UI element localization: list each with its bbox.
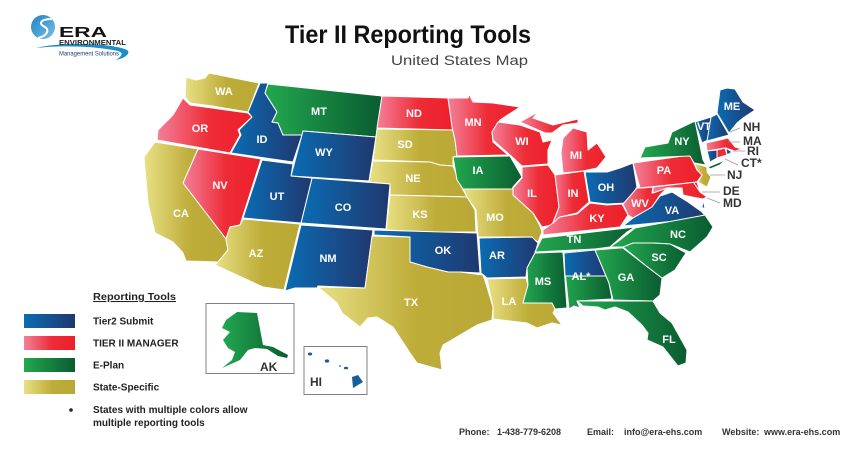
state: Kansas: KS [412,209,428,221]
callout labels: northeast states: MD [723,196,742,210]
state: South Dakota: SD [397,139,413,151]
state: Tennessee [535,227,635,252]
state: Louisiana: LA [502,296,516,308]
inset: Alaska: AK [260,360,278,374]
state: West Virginia: WV [631,198,650,210]
state: Wyoming [291,131,376,181]
logo: ERA Environmental Management Solutions [31,15,128,60]
state: North Dakota [377,96,453,130]
state: California [144,142,228,262]
footer contact details: Website: [722,427,759,437]
footer contact details: Phone: [459,427,490,437]
legend note: multiple reporting tools [93,418,205,429]
logo: ERA Environmental Management Solutions: ERA [59,24,107,41]
callout labels: northeast states: MA [743,134,762,148]
title: Tier II Reporting Tools [285,21,531,49]
legend item: State-Specific [24,380,160,394]
legend item: TIER II MANAGER [24,336,179,350]
callout labels: northeast states: CT* [741,156,762,170]
state: Massachusetts [706,138,742,151]
state: Virginia [623,192,707,226]
state: Louisiana [487,278,562,328]
state: Alabama (two tools): AL* [572,271,591,283]
legend item: Tier2 Submit [24,314,154,328]
logo: ERA Environmental Management Solutions: Management Solutions [59,50,120,58]
state: Missouri [463,189,542,242]
state: Oklahoma [374,230,480,273]
state: Florida: FL [662,334,676,346]
legend item: TIER II MANAGER: TIER II MANAGER [93,338,179,350]
subtitle: United States Map [391,53,528,68]
state: Florida [577,301,687,366]
state: Wisconsin: WI [515,136,529,148]
state: Vermont: VT [697,121,711,133]
state: Virginia: VA [665,205,679,217]
state: North Carolina [610,215,713,252]
state: Arkansas: AR [489,250,505,262]
state: Michigan [520,112,606,173]
state: Utah [243,160,312,223]
state: New Mexico: NM [319,253,337,265]
state: Ohio [585,163,637,204]
state: Kansas [386,195,476,232]
callout labels: northeast states: NJ [727,168,742,182]
state: Michigan: MI [570,150,582,162]
state: Idaho: ID [256,134,268,146]
state: Maine: ME [724,101,740,113]
state: Nevada: NV [212,180,228,192]
state: Georgia: GA [618,272,634,284]
footer contact details [459,427,840,437]
state: Indiana: IN [568,188,579,200]
state: Connecticut [707,148,727,162]
logo: ERA Environmental Management Solutions: ENVIRONMENTAL [59,38,126,47]
state: Iowa: IA [472,165,484,177]
state: South Carolina [623,243,686,278]
map: contiguous United States [144,73,755,370]
state: Arizona [215,219,300,290]
footer contact details: Email: [587,427,614,437]
state: Missouri: MO [486,212,504,224]
state: Maine [717,88,755,133]
state: Texas [318,236,493,370]
state: New Jersey [694,163,711,187]
state: West Virginia [623,187,667,218]
inset: Hawaii: HI [310,375,322,389]
state: Colorado: CO [335,202,352,214]
inset: Alaska [206,304,294,374]
state: Kentucky [543,203,628,235]
state: New York [640,121,725,169]
state: Illinois: IL [527,188,537,200]
legend [24,291,248,429]
state: Arizona: AZ [249,248,264,260]
state: New Mexico [285,225,373,291]
state: Oregon [157,98,252,153]
state: South Dakota [373,129,457,166]
state: Georgia [595,248,662,301]
state: Montana: MT [311,106,327,118]
state: North Dakota: ND [406,108,422,120]
legend item: E-Plan: E-Plan [93,360,124,372]
state: Utah: UT [270,191,285,203]
state: Montana [265,84,382,137]
legend item: Tier2 Submit: Tier2 Submit [93,316,154,328]
legend note [69,405,248,429]
state: Pennsylvania: PA [657,165,671,177]
state: South Carolina: SC [651,252,667,264]
state: Nebraska [369,161,467,197]
state: Nebraska: NE [405,173,421,185]
footer contact details: www.era-ehs.com [763,427,840,437]
state: Texas: TX [404,297,419,309]
inset: Hawaii [304,346,367,394]
state: Idaho [231,83,302,162]
callout labels: northeast states [702,120,762,210]
state: New Hampshire [707,114,729,141]
footer contact details: info@era-ehs.com [624,427,702,437]
state: Minnesota [448,94,520,156]
state: Indiana [553,171,589,223]
state: Iowa [453,156,522,190]
state: Illinois [513,165,559,227]
state: Ohio: OH [598,182,614,194]
legend heading: Reporting Tools [93,291,176,303]
state: Nevada [183,149,261,239]
state: Maryland and Delaware [653,182,707,199]
state: Oklahoma: OK [435,245,451,257]
state: Mississippi [523,252,567,309]
state: Mississippi: MS [535,276,551,288]
state: Rhode Island [726,148,732,155]
state: Pennsylvania [633,155,702,188]
state: Washington: WA [215,86,233,98]
callout labels: northeast states: DE [723,184,740,198]
callout labels: northeast states: RI [747,144,759,158]
legend item: State-Specific: State-Specific [93,382,160,394]
state: New York: NY [674,136,690,148]
state: California: CA [173,208,189,220]
state: Tennessee: TN [567,234,581,246]
state: Vermont [695,117,711,143]
state: Wyoming: WY [315,147,334,159]
legend note: States with multiple colors allow [93,405,248,416]
footer contact details: 1-438-779-6208 [497,427,561,437]
state: Alabama (two tools) [563,249,612,309]
state: Oregon: OR [192,123,208,135]
state: Wisconsin [492,122,552,166]
state: Arkansas [479,237,538,278]
state: Kentucky: KY [589,213,605,225]
state: North Carolina: NC [670,229,686,241]
legend item: E-Plan [24,358,124,372]
state: Minnesota: MN [464,117,482,129]
state: Colorado [301,178,390,229]
callout labels: northeast states: NH [743,120,760,134]
state: Washington [185,73,259,112]
